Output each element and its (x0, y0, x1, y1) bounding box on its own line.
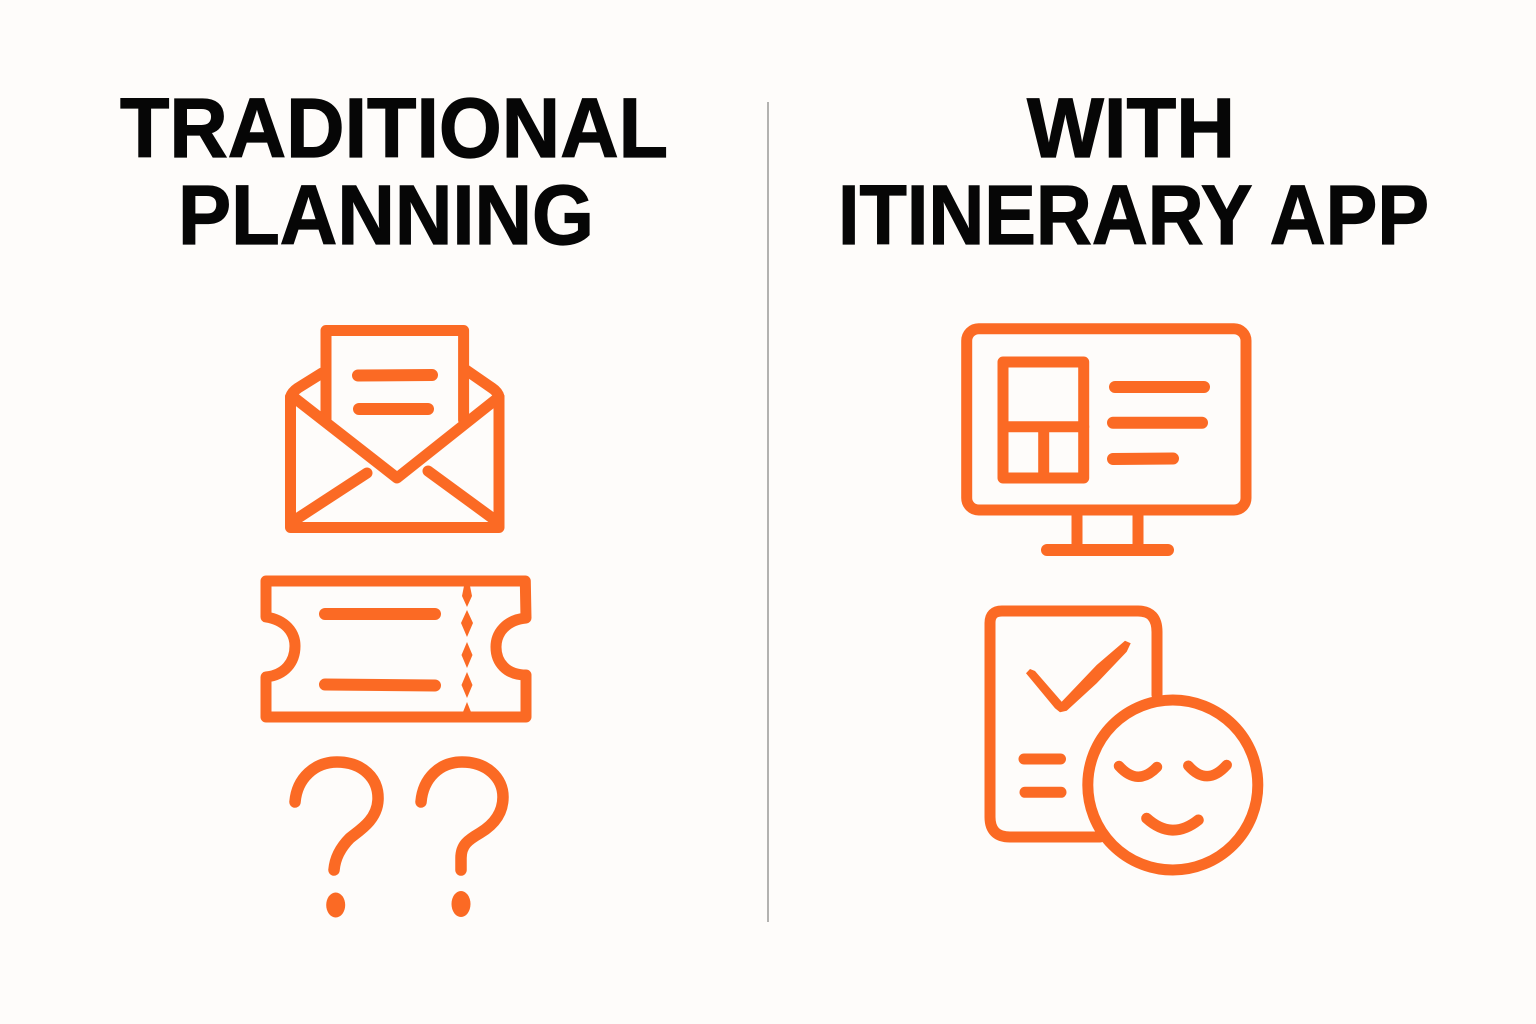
heading: traditional planning (120, 81, 668, 262)
icon: open envelope with letter (290, 330, 499, 528)
heading: with itinerary app (838, 81, 1429, 262)
heading: with itinerary app: ITINERARY APP (838, 168, 1429, 262)
heading: traditional planning: TRADITIONAL (120, 81, 668, 175)
icon: desktop monitor with itinerary layout (967, 329, 1246, 550)
icon: two question marks (295, 762, 503, 918)
heading: traditional planning: PLANNING (178, 168, 594, 262)
icon: checklist document with calm smiling face (990, 611, 1258, 870)
icon: ticket with perforation (266, 581, 526, 717)
heading: with itinerary app: WITH (1027, 81, 1235, 175)
